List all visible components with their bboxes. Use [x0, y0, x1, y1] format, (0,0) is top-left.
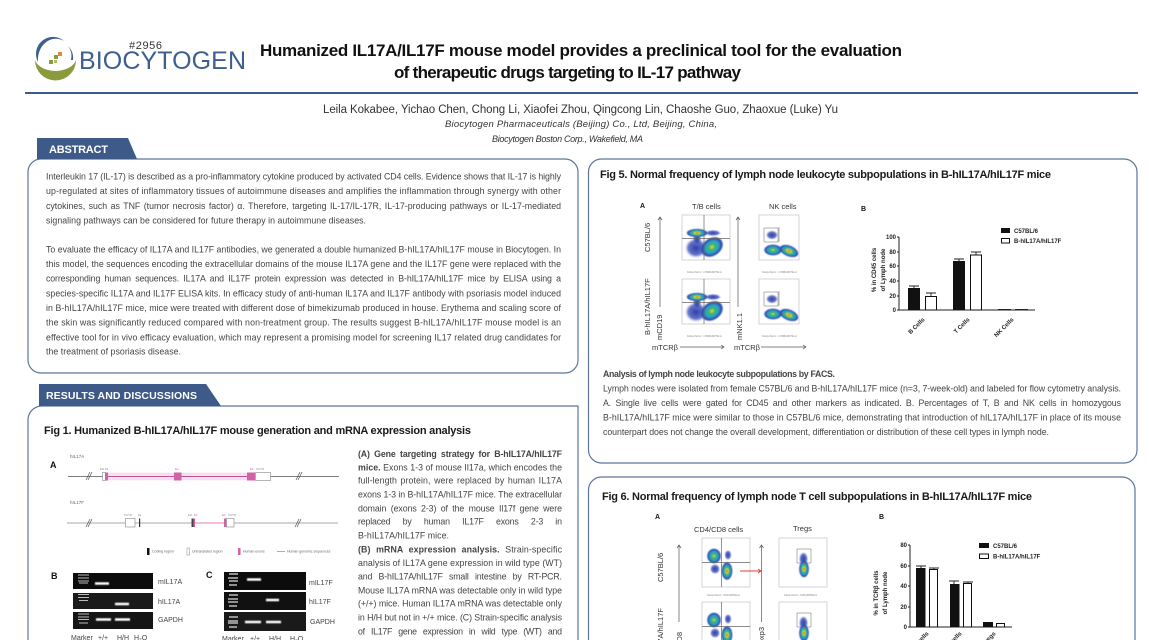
panel: figure 5: [588, 159, 1137, 463]
logo: Biocytogen: BIOCYTOGEN: [79, 47, 246, 75]
text block: figure 5 description: Analysis of lymph node leukocyte subpopulations by FACS.: [603, 369, 835, 379]
figure 6B: bar chart: [874, 514, 1041, 640]
figure 6B: bar chart: 0: [904, 625, 908, 631]
legend: gene diagram: Human exons: [243, 550, 265, 554]
figure 6B: bar chart: B: [879, 514, 884, 521]
figure 5B: bar chart: T Cells: [953, 317, 972, 335]
figure 6B: bar chart: C57BL/6: [993, 544, 1018, 550]
text block: abstract paragraph 1: Interleukin 17 (IL-17) is described as a pro-inflammatory cytokine produced by activated CD4 cells. Evidence shows that IL-17 is highly: [46, 172, 562, 182]
figure 5B: bar chart: 80: [889, 250, 897, 256]
figure 5B: bar chart: 0: [893, 308, 897, 314]
figure 6B: bar chart: % in TCRβ cells: [874, 570, 880, 616]
text block: abstract paragraph 2: corresponding human sequences. IL17A and IL17F protein expression was detected in B-hIL17A/hIL17F mice by ELISA using a: [46, 274, 561, 284]
figure 5A: flow cytometry plots: mNK1.1: [735, 313, 744, 340]
figure 5A: flow cytometry plots: Comp-VL2-A :: mTCRb-BV711-A: [687, 335, 722, 338]
text block: figure 1 description: in H/H but not in +/+ mice. (C) Strain-specific analysis: [358, 612, 563, 622]
text block: abstract paragraph 2: in B-hIL17A/hIL17F mice, mice were treated with different dose of bimekizumab produced in house. Erythema and scaling score of: [46, 303, 562, 313]
text block: figure 1 description: domain (exons 2-3) of the mouse Il17f gene were: [358, 504, 562, 514]
text block: figure 1 description: [358, 449, 563, 636]
panel: figure 6: [588, 477, 1135, 640]
heading: figure 5: Fig 5. Normal frequency of lymph node leukocyte subpopulations in B-hIL17A/hIL17F mice: [600, 169, 1051, 181]
figure 1B: gel: mIL17A: [158, 579, 182, 586]
figure 6A: flow cytometry plots: [655, 514, 827, 640]
text block: figure 1 description: B-hIL17A/hIL17F mice.: [358, 530, 449, 540]
figure 1C: gel: [206, 570, 335, 640]
text block: figure 5 description: Lymph nodes were isolated from female C57BL/6 and B-hIL17A/hIL17F mice (n=3, 7-week-old) and labeled for flow cytometry analysis.: [603, 384, 1121, 394]
text block: abstract paragraph 2: To evaluate the efficacy of IL17A and IL17F antibodies, we generated a double humanized B-hIL17A/hIL17F mouse in Biocytogen. In: [46, 244, 561, 254]
text block: figure 1 description: mice. Exons 1-3 of mouse Il17a, which encodes the: [358, 462, 562, 472]
figure 5A: flow cytometry plots: Comp-VL2-A :: mTCRb-BV711-A: [762, 335, 797, 338]
figure 5B: bar chart: [861, 206, 1062, 339]
text block: abstract paragraph 2: this model, the sequences encoding the extracellular domains of the mouse IL17A gene and the IL17F gene were replaced with the: [46, 259, 561, 269]
figure 5A: flow cytometry plots: T/B cells: [692, 202, 721, 211]
figure 1A: gene targeting diagram: hIL17F: [70, 500, 84, 505]
figure 1A: gene targeting diagram: A: [50, 460, 57, 470]
header rule: [25, 92, 1138, 94]
figure 5A: flow cytometry plots: B-hIL17A/hIL17F: [643, 278, 652, 335]
figure 1A: gene targeting diagram: E1: [138, 513, 142, 517]
figure 5B: bar chart: of Lymph node: [881, 248, 887, 291]
title: Humanized IL17A/IL17F mouse model provides a preclinical tool for the evaluation: [260, 41, 902, 60]
text block: figure 1 description: full-length protein, were replaced by human IL17A: [358, 476, 562, 486]
figure 1A: gene targeting diagram: 5'UTR: [124, 513, 132, 517]
figure 5B: bar chart: 20: [889, 294, 897, 300]
text block: abstract paragraph 1: up-regulated at sites of inflammatory tissues of autoimmune diseases and amplifies the inflammation through synergy with other: [46, 186, 561, 196]
figure 6A: flow cytometry plots: Tregs: [793, 524, 812, 533]
figure 5B: bar chart: B: [861, 206, 866, 213]
figure 1C: gel: mIL17F: [309, 580, 333, 587]
panel: abstract: [28, 159, 578, 373]
figure 1A: gene targeting diagram: E3: [250, 467, 254, 471]
figure 6B: bar chart: of Lymph node: [883, 571, 889, 614]
figure 5A: flow cytometry plots: mCD19: [655, 315, 664, 340]
heading: figure 6: Fig 6. Normal frequency of lymph node T cell subpopulations in B-hIL17A/hIL17F mice: [602, 491, 1032, 503]
legend: gene diagram: Untranslated region: [192, 550, 223, 554]
figure 5A: flow cytometry plots: NK cells: [769, 202, 797, 211]
figure 5B: bar chart: B Cells: [908, 317, 927, 336]
figure 1A: gene targeting diagram: E2/: [188, 513, 192, 517]
title: of therapeutic drugs targeting to IL-17 pathway: [394, 63, 742, 82]
text block: figure 5 description: [603, 369, 1122, 437]
heading: abstract tab: ABSTRACT: [49, 144, 108, 156]
text block: figure 1 description: analysis of IL17A gene expression in wild type (WT): [358, 558, 562, 568]
figure 1B: gel: B: [51, 571, 58, 581]
figure 6B: bar chart: 80: [900, 543, 908, 549]
figure 5A: flow cytometry plots: [640, 202, 806, 352]
figure 5B: bar chart: 40: [889, 279, 897, 285]
text block: abstract paragraph 2: the skin was significantly reduced compared with non-treatment group. The results suggest B-hIL17A/hIL17F mouse model is an: [46, 318, 561, 328]
figure 5A: flow cytometry plots: mTCRβ: [734, 343, 761, 352]
text block: figure 5 description: B-hIL17A/hIL17F mice were similar to those in C57BL/6 mice, demonstrating that introduction of hIL17A/hIL17F in place of its mouse: [603, 412, 1121, 422]
figure 5B: bar chart: 60: [889, 264, 897, 270]
text block: figure 1 description: and B-hIL17A/hIL17F small intestine by RT-PCR.: [358, 572, 562, 582]
text block: figure 1 description: replaced by human IL17F exons 2-3 in: [358, 516, 562, 526]
text block: abstract paragraph 1: cytokines, such as TNF (tumor necrosis factor) α. Therefore, targeting IL-17/IL-17R, IL-17-producing pathways or IL-17-mediated: [46, 201, 561, 211]
text block: figure 1 description: (A) Gene targeting strategy for B-hIL17A/hIL17F: [358, 449, 563, 459]
text block: abstract paragraph 1: signaling pathways can be considered for future therapy in autoimmune diseases.: [46, 216, 366, 226]
legend: gene diagram: [147, 548, 331, 555]
text block: abstract paragraph 2: [46, 244, 562, 356]
figure 5A: flow cytometry plots: A: [640, 203, 645, 210]
figure 1A: gene targeting diagram: 3'UTR: [228, 513, 236, 517]
figure 1A: gene targeting diagram: E3: [222, 513, 226, 517]
heading: results and discussions tab: RESULTS AND DISCUSSIONS: [46, 390, 197, 402]
authors and affiliations: Biocytogen Boston Corp., Wakefield, MA: [492, 134, 643, 144]
text block: figure 5 description: A. Single live cells were gated for CD45 and other markers as indicated. B. Percentages of T, B and NK cells in homozygous: [603, 398, 1122, 408]
figure 5A: flow cytometry plots: C57BL/6: [643, 223, 652, 252]
text block: figure 1 description: Mouse IL17A mRNA was detectable only in wild type: [358, 586, 562, 596]
text block: abstract paragraph 1: [46, 172, 562, 226]
figure 1A: gene targeting diagram: E2: [175, 467, 179, 471]
text block: abstract paragraph 2: effective tool for in vivo efficacy evaluation, which may represent a promising model for screening IL17 related drug candidates for: [46, 332, 561, 342]
figure 5B: bar chart: 100: [886, 235, 897, 241]
figure 6B: bar chart: B-hIL17A/hIL17F: [993, 554, 1041, 560]
figure 1A: gene targeting diagram: E2: [194, 513, 198, 517]
figure 5B: bar chart: NK Cells: [994, 317, 1016, 339]
figure 6B: bar chart: 60: [900, 564, 908, 570]
figure 5B: bar chart: C57BL/6: [1014, 229, 1039, 235]
figure 1C: gel: hIL17F: [309, 599, 331, 606]
legend: gene diagram: Human genomic sequences: [287, 550, 331, 554]
heading: abstract tab: [37, 138, 137, 159]
legend: gene diagram: Coding region: [152, 550, 174, 554]
figure 6A: flow cytometry plots: Comp-VL2-A :: hCD4-BV510-A: [707, 594, 740, 597]
panel: results and discussions: [28, 406, 578, 640]
title: [260, 41, 902, 82]
text block: figure 1 description: exons 1-3 in B-hIL17A/hIL17F mice. The extracellular: [358, 490, 562, 500]
figure 1A: gene targeting diagram: E3/: [100, 467, 104, 471]
figure 1C: gel: C: [206, 570, 213, 580]
text block: figure 5 description: counterpart does not change the overall development, differentiation or distribution of these cell types in lymph node.: [603, 427, 1049, 437]
figure 6A: flow cytometry plots: A: [655, 514, 660, 521]
figure 6A: flow cytometry plots: C57BL/6: [656, 553, 665, 582]
text block: figure 1 description: (+/+) mice. Human IL17A mRNA was detectable only: [358, 598, 563, 608]
text block: abstract paragraph 2: species-specific IL17A and IL17F ELISA kits. In efficacy study of anti-human IL17A and IL17F antibody with psoriasis model induced: [46, 288, 561, 298]
logo: Biocytogen: [35, 37, 246, 80]
logo: Biocytogen: #2956: [129, 40, 162, 52]
text block: figure 1 description: (B) mRNA expression analysis. Strain-specific: [358, 544, 563, 554]
figure 1A: gene targeting diagram: E1: [105, 467, 109, 471]
figure 6A: flow cytometry plots: CD4/CD8 cells: [694, 525, 743, 534]
authors and affiliations: [323, 104, 838, 144]
figure 1B: gel: hIL17A: [158, 599, 181, 606]
text block: figure 1 description: of IL17F gene expression in wild type (WT) and: [358, 626, 562, 636]
text block: abstract paragraph 2: the treatment of psoriasis disease.: [46, 346, 181, 356]
figure 5B: bar chart: B-hIL17A/hIL17F: [1014, 239, 1062, 245]
figure 6A: flow cytometry plots: Comp-VL2-A :: hCD4-BV510-A: [784, 594, 817, 597]
figure 1A: gene targeting diagram: 3'UTR: [256, 467, 264, 471]
figure 5A: flow cytometry plots: Comp-VL2-A :: mTCRb-BV711-A: [687, 271, 722, 274]
figure 1B: gel: GAPDH: [158, 617, 183, 624]
figure 1B: gel: [51, 571, 183, 640]
figure 6B: bar chart: 40: [900, 584, 908, 590]
figure 5A: flow cytometry plots: Comp-VL2-A :: mTCRb-BV711-A: [762, 271, 797, 274]
figure 5A: flow cytometry plots: mTCRβ: [652, 343, 679, 352]
figure 5B: bar chart: % in CD45 cells: [872, 247, 878, 292]
figure 6B: bar chart: 20: [900, 605, 908, 611]
figure 1A: gene targeting diagram: [50, 454, 339, 527]
heading: results and discussions tab: [39, 384, 221, 406]
figure 1A: gene targeting diagram: hIL17A: [70, 454, 84, 459]
authors and affiliations: Biocytogen Pharmaceuticals (Beijing) Co., Ltd, Beijing, China,: [445, 119, 717, 130]
authors and affiliations: Leila Kokabee, Yichao Chen, Chong Li, Xiaofei Zhou, Qingcong Lin, Chaoshe Guo, Zhaoxue (Luke) Yu: [323, 104, 838, 116]
heading: figure 1: Fig 1. Humanized B-hIL17A/hIL17F mouse generation and mRNA expression analysis: [44, 425, 471, 437]
figure 1C: gel: GAPDH: [310, 619, 335, 626]
